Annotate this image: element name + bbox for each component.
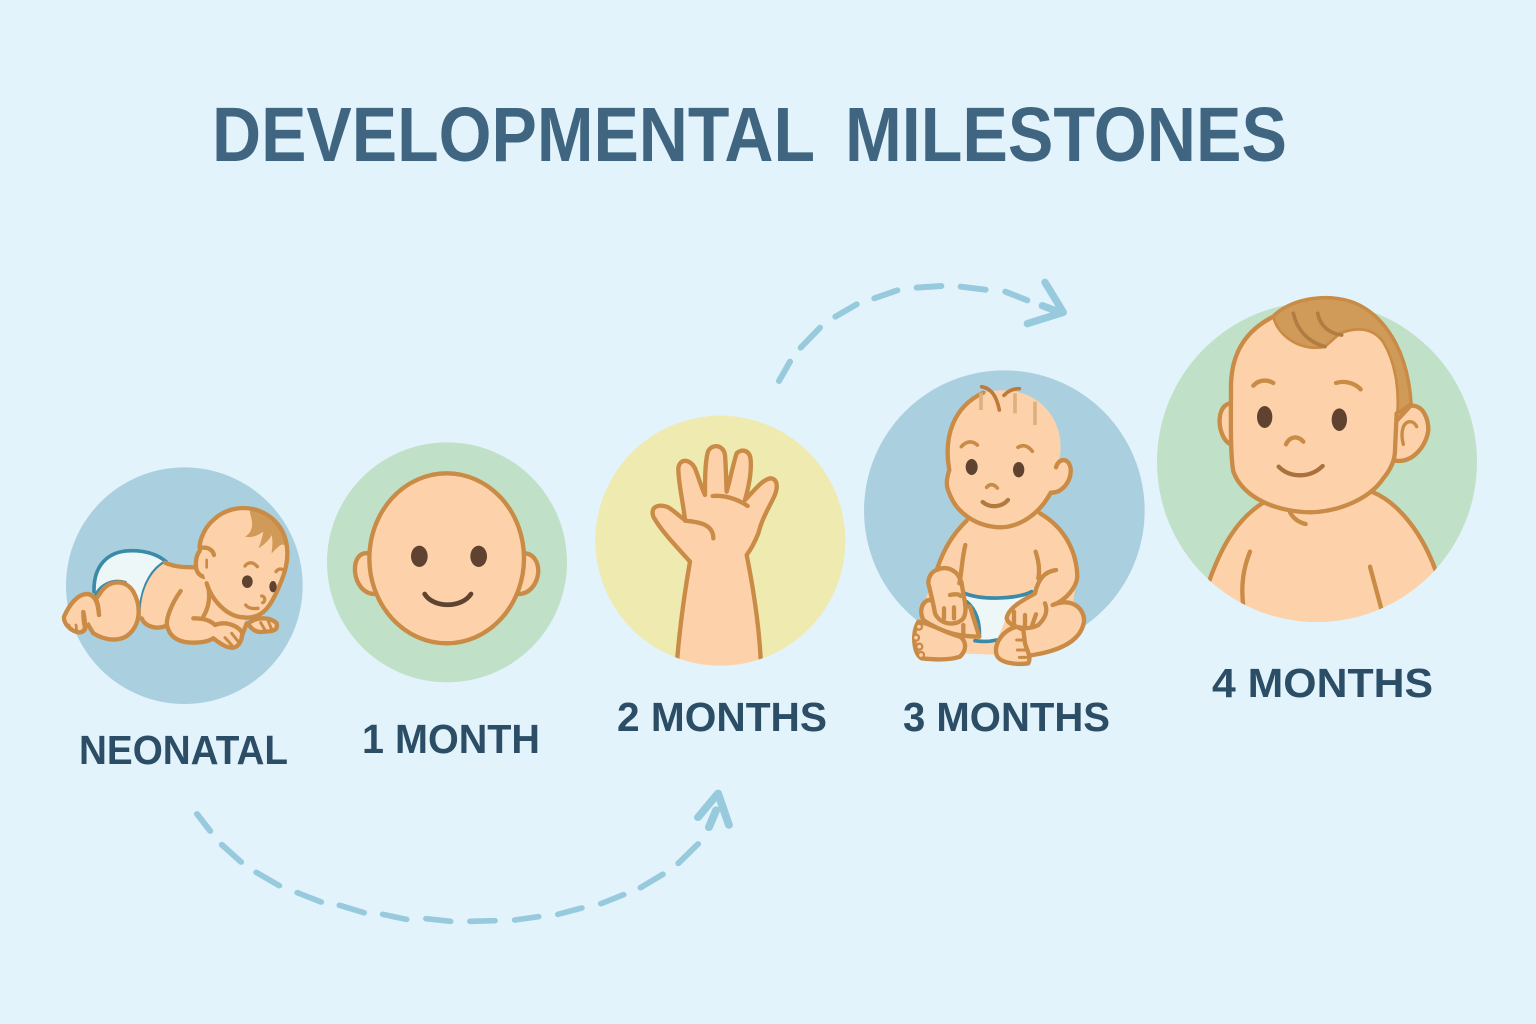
arrow: dashed curve from 2 months to 4 months bbox=[779, 282, 1063, 381]
panel: 1 month face illustration bbox=[327, 442, 567, 682]
label: neonatal: NEONATAL bbox=[79, 727, 288, 773]
title: DEVELOPMENTAL bbox=[212, 92, 815, 178]
label: 1 month: 1 MONTH bbox=[362, 716, 540, 762]
label: 4 months: 4 MONTHS bbox=[1212, 660, 1433, 706]
infographic canvas bbox=[62, 107, 1477, 924]
arrow: dashed curve from neonatal to 2 months bbox=[197, 793, 729, 921]
label: 3 months: 3 MONTHS bbox=[903, 694, 1110, 740]
panel: neonatal baby illustration bbox=[64, 467, 303, 704]
panel: 3 months sitting baby illustration bbox=[864, 370, 1145, 664]
title bbox=[212, 92, 1287, 178]
panel: 2 months hand illustration bbox=[595, 416, 845, 673]
title: MILESTONES bbox=[845, 92, 1287, 178]
panel: 4 months baby portrait illustration bbox=[1157, 298, 1477, 652]
label: 2 months: 2 MONTHS bbox=[617, 694, 827, 740]
